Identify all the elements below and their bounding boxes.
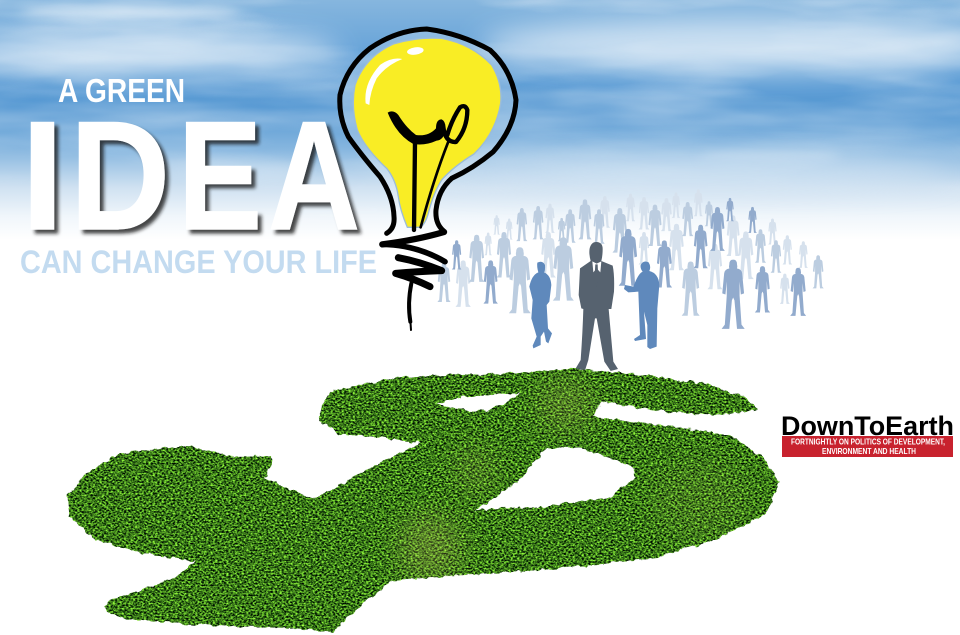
- logo red band: [782, 436, 953, 457]
- grass dollar sign: [67, 369, 778, 633]
- heading: idea: D: [70, 89, 170, 262]
- light bulb icon: [340, 29, 517, 330]
- heading: idea: E: [178, 89, 262, 262]
- logo: Down To Earth: [781, 411, 954, 457]
- heading: a green: A GREEN: [58, 72, 185, 109]
- bulb yellow fill: [353, 38, 501, 227]
- logo: Down To Earth: ENVIRONMENT AND HEALTH: [822, 446, 916, 456]
- main businessman silhouette: [575, 242, 618, 371]
- highlights: [365, 58, 402, 105]
- screw base scribble: [382, 232, 445, 330]
- bulb outline: [340, 29, 516, 233]
- bulb glass fill: [340, 29, 517, 228]
- subheading: can change your life: CAN CHANGE YOUR LIFE: [20, 244, 377, 280]
- logo wordmark: DownToEarth: [781, 411, 954, 441]
- filament: [388, 106, 467, 230]
- heading: idea: [21, 89, 360, 262]
- heading: idea: A: [268, 89, 360, 262]
- crowd of silhouettes: [437, 189, 824, 349]
- sky with clouds: [0, 0, 960, 240]
- foreground blue figures: [529, 261, 659, 349]
- heading: idea: I: [21, 89, 64, 262]
